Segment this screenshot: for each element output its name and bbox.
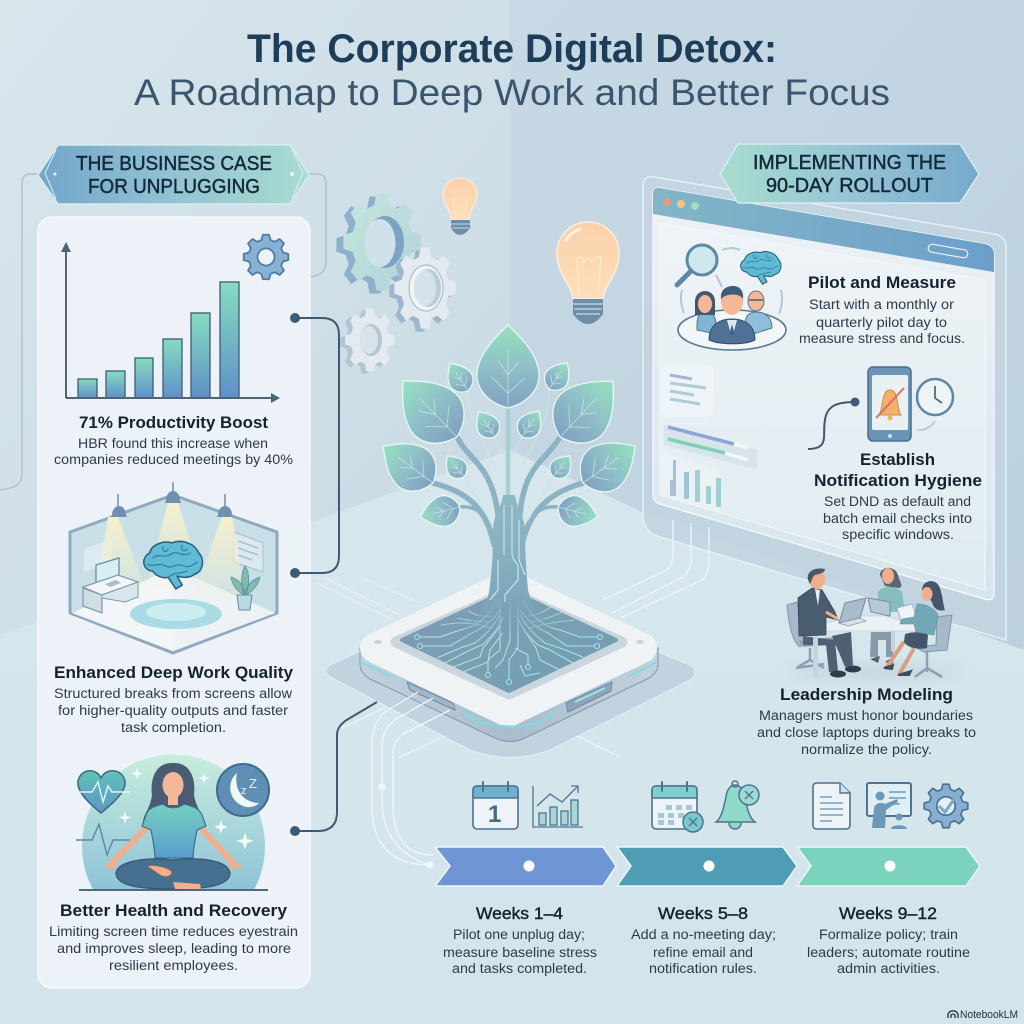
text: deep work: Enhanced Deep Work Quality <box>54 664 294 682</box>
heading banner: rollout: IMPLEMENTING THE <box>753 152 946 174</box>
icon: presentation trainer <box>867 783 911 829</box>
icon: calendar with x <box>652 782 703 832</box>
text: weeks 9-12: Formalize policy; train <box>819 927 958 942</box>
bar chart: productivity <box>61 242 280 403</box>
timeline chevrons <box>435 847 980 886</box>
heading banner: business case <box>38 145 309 204</box>
icon: calendar one <box>473 782 518 829</box>
heading banner: rollout <box>720 144 979 203</box>
text: notification hygiene: Establish <box>860 451 935 469</box>
text: notification hygiene: batch email checks into <box>823 511 972 526</box>
icon: small light bulb <box>443 178 477 235</box>
text: weeks 5-8: Weeks 5–8 <box>658 904 748 923</box>
floor circuit lines <box>317 577 620 758</box>
illustration: deep work room <box>70 482 277 653</box>
title: The Corporate Digital Detox: <box>247 27 777 71</box>
text: weeks 5-8 <box>631 904 776 976</box>
text: deep work: task completion. <box>121 720 226 735</box>
heading banner: business case: FOR UNPLUGGING <box>88 176 260 198</box>
title <box>134 27 890 113</box>
icon: growth chart <box>533 786 583 827</box>
icon: phone with muted bell <box>868 367 911 441</box>
notebooklm mark: NotebookLM <box>960 1009 1018 1021</box>
icon: gear <box>244 235 288 279</box>
text: health: Better Health and Recovery <box>60 902 288 920</box>
illustration: meditation <box>76 754 270 891</box>
window title bar <box>653 188 994 272</box>
text: deep work: for higher-quality outputs and faster <box>58 703 289 718</box>
text: pilot and measure: measure stress and focus. <box>799 331 965 346</box>
title: A Roadmap to Deep Work and Better Focus <box>134 72 890 113</box>
text: weeks 5-8: notification rules. <box>649 961 757 976</box>
text: notification hygiene: specific windows. <box>842 527 954 542</box>
text: productivity boost: HBR found this increase when <box>78 436 268 451</box>
platform base <box>360 585 658 742</box>
text: pilot and measure: quarterly pilot day to <box>816 315 947 330</box>
icon: moon: Z <box>249 776 257 791</box>
platform floor shadow <box>326 652 695 758</box>
text: leadership modeling <box>757 686 976 757</box>
wires from platform to timeline <box>372 692 450 868</box>
text: leadership modeling: Leadership Modeling <box>780 686 953 704</box>
text: leadership modeling: Managers must honor boundaries <box>759 708 973 723</box>
timeline icons <box>473 781 968 832</box>
connector: panel dots to platform <box>290 313 377 836</box>
text: weeks 9-12 <box>807 904 970 976</box>
branches and trunk <box>433 389 583 550</box>
text: notification hygiene: Set DND as default and <box>824 494 971 509</box>
text: pilot and measure <box>799 274 965 346</box>
icon: large light bulb <box>557 222 619 324</box>
panel: browser window rollout <box>643 177 1006 640</box>
illustration: central tree and platform <box>360 325 658 742</box>
icon: bell with x <box>716 781 759 829</box>
text: weeks 1-4 <box>443 904 597 976</box>
text: pilot and measure: Start with a monthly or <box>809 297 955 312</box>
decorative side widgets <box>661 365 757 512</box>
text: health: resilient employees. <box>109 958 238 973</box>
icon: clock <box>917 379 953 430</box>
connector: notification <box>808 398 860 449</box>
text: weeks 1-4: Weeks 1–4 <box>476 904 563 923</box>
text: notification hygiene: Notification Hygiene <box>814 472 982 490</box>
text: pilot and measure: Pilot and Measure <box>808 274 956 292</box>
icon: moon: z <box>241 785 246 797</box>
text: productivity boost: companies reduced meetings by 40% <box>54 452 293 467</box>
text: productivity boost: 71% Productivity Boost <box>79 414 269 432</box>
text: weeks 9-12: Weeks 9–12 <box>839 904 937 923</box>
text: deep work: Structured breaks from screens allow <box>54 686 292 701</box>
icon: gear check <box>924 784 968 828</box>
text: health: and improves sleep, leading to more <box>57 941 291 956</box>
panel: business case <box>38 217 310 988</box>
text: weeks 1-4: and tasks completed. <box>452 961 587 976</box>
icon: large 3D gears <box>336 193 456 374</box>
circuit roots <box>414 600 602 684</box>
icon: calendar one: 1 <box>488 801 501 828</box>
text: weeks 9-12: leaders; automate routine <box>807 945 970 960</box>
text: health <box>49 902 298 973</box>
connector outline: left section <box>0 174 326 490</box>
text: weeks 1-4: measure baseline stress <box>443 945 597 960</box>
text: notification hygiene <box>814 451 982 542</box>
illustration: leadership team <box>787 568 960 681</box>
text: weeks 5-8: Add a no-meeting day; <box>631 927 776 942</box>
leaves <box>369 325 649 532</box>
text: deep work <box>54 664 294 735</box>
text: productivity boost <box>54 414 293 467</box>
icon: heart <box>73 771 130 813</box>
illustration: pilot team <box>677 245 786 350</box>
icon: moon <box>217 764 269 816</box>
text: health: Limiting screen time reduces eyestrain <box>49 924 298 939</box>
text: weeks 5-8: refine email and <box>653 945 753 960</box>
text: leadership modeling: normalize the policy. <box>801 742 932 757</box>
text: weeks 9-12: admin activities. <box>837 961 940 976</box>
icon: document <box>813 783 850 829</box>
text: weeks 1-4: Pilot one unplug day; <box>453 927 585 942</box>
text: leadership modeling: and close laptops during breaks to <box>757 725 976 740</box>
heading banner: rollout: 90-DAY ROLLOUT <box>766 175 933 197</box>
window-to-platform wires <box>603 520 709 618</box>
heading banner: business case: THE BUSINESS CASE <box>76 153 272 175</box>
